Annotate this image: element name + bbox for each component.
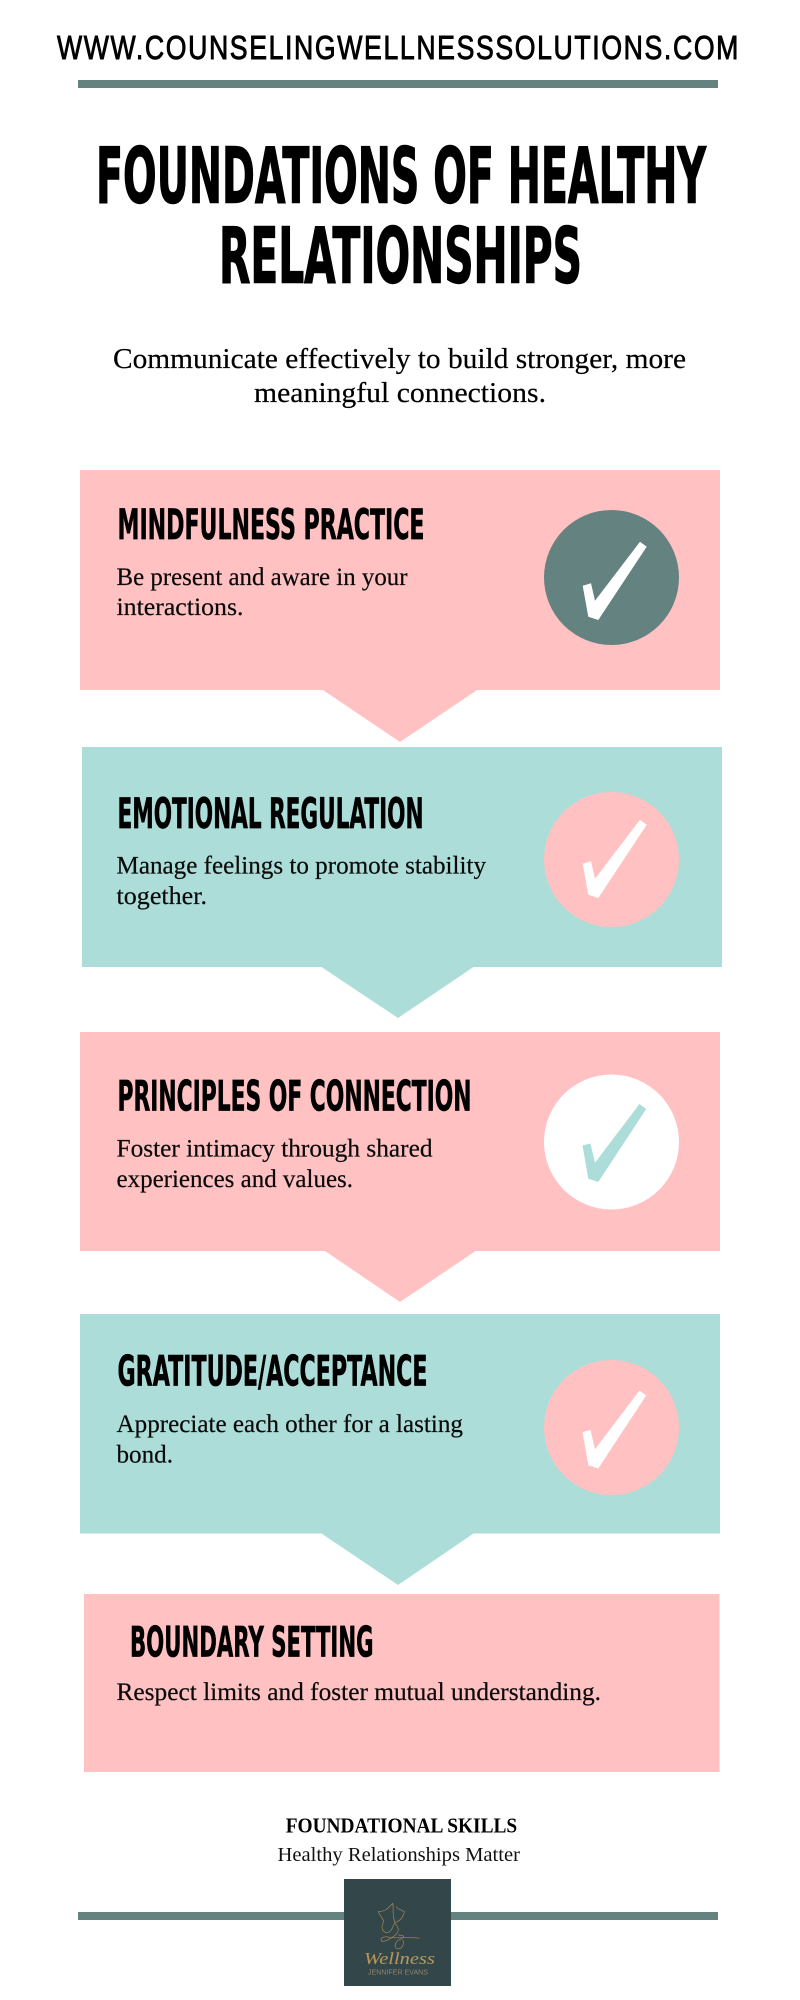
- title: [96, 132, 707, 302]
- heading: PRINCIPLES OF CONNECTION: [118, 1072, 472, 1120]
- icon: butterfly line art: [378, 1903, 419, 1949]
- panel background with arrow: [82, 747, 722, 1018]
- heading: GRATITUDE/ACCEPTANCE: [118, 1346, 428, 1396]
- description: bond.: [116, 1442, 173, 1468]
- description: Be present and aware in your: [116, 564, 408, 591]
- panel background with arrow: [80, 1032, 720, 1302]
- panel: boundary setting: [84, 1594, 720, 1772]
- subtitle: meaningful connections.: [254, 378, 546, 409]
- top divider bar: [78, 80, 718, 88]
- footer tagline: Healthy Relationships Matter: [278, 1844, 520, 1866]
- description: interactions.: [116, 594, 244, 621]
- description: Foster intimacy through shared: [116, 1136, 433, 1162]
- icon: check circle: [544, 1360, 679, 1495]
- logo: [344, 1879, 451, 1986]
- description: Respect limits and foster mutual understanding.: [116, 1679, 601, 1706]
- heading: MINDFULNESS PRACTICE: [118, 500, 424, 549]
- footer heading: FOUNDATIONAL SKILLS: [286, 1814, 517, 1838]
- description: [116, 1411, 463, 1468]
- description: Appreciate each other for a lasting: [116, 1411, 463, 1438]
- heading: EMOTIONAL REGULATION: [118, 789, 424, 838]
- logo name: JENNIFER EVANS: [368, 1968, 428, 1976]
- logo script wordmark: Wellness: [364, 1949, 435, 1968]
- bottom divider bar: [78, 1912, 718, 1920]
- subtitle: [113, 344, 686, 409]
- description: [116, 564, 408, 621]
- panel background with arrow: [80, 470, 720, 742]
- description: [116, 1136, 433, 1193]
- panel: mindfulness practice: [80, 470, 720, 742]
- description: [116, 852, 487, 910]
- icon: check circle: [544, 510, 679, 645]
- icon: check circle: [544, 1074, 679, 1210]
- subtitle: Communicate effectively to build stronger, more: [113, 344, 686, 375]
- panel background with arrow: [80, 1314, 720, 1585]
- description: together.: [116, 883, 207, 910]
- panel: gratitude and acceptance: [80, 1314, 720, 1585]
- heading: BOUNDARY SETTING: [130, 1618, 374, 1666]
- description: Manage feelings to promote stability: [116, 852, 487, 880]
- panel background: [84, 1594, 720, 1772]
- panel: emotional regulation: [82, 747, 722, 1018]
- panel: principles of connection: [80, 1032, 720, 1302]
- description: experiences and values.: [116, 1166, 353, 1193]
- icon: check circle: [544, 792, 679, 927]
